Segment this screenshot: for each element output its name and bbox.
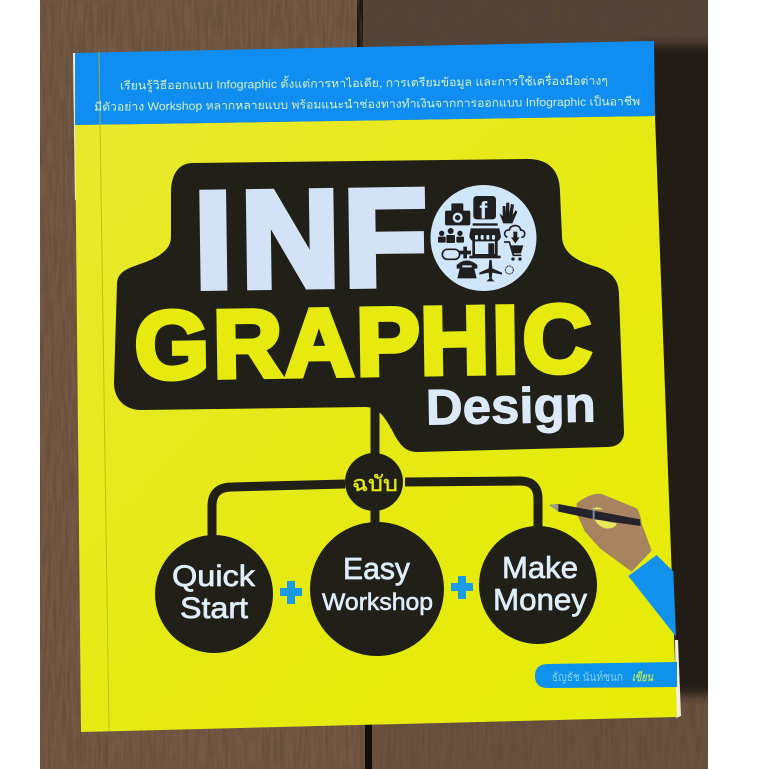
pen: [549, 504, 641, 526]
circle: Quick Start: [155, 535, 273, 653]
icon: cloud download: [505, 225, 525, 243]
icon: facebook: f: [479, 198, 488, 225]
title blob: [114, 159, 624, 452]
icon badge: [430, 185, 536, 291]
yellow cover: [75, 116, 677, 732]
icon: airplane: [479, 260, 502, 281]
circle: Make Money: [479, 526, 597, 644]
circle: Easy Workshop: Easy: [343, 551, 410, 586]
icon: cart: [504, 242, 523, 261]
icon: telephone: [457, 260, 477, 278]
title: Design: Design: [425, 377, 596, 435]
circle: Make Money: Make: [502, 550, 578, 585]
plus sign: [280, 581, 302, 604]
author tag: ธัญธัช นันท์ชนก: [552, 670, 623, 684]
circle label: ฉบับ: ฉบับ: [352, 473, 398, 496]
book cover: [73, 41, 681, 732]
icon: camera: [445, 203, 470, 225]
title: INF: INF: [193, 161, 428, 318]
circle: Quick Start: Quick: [172, 560, 256, 593]
circle label: ฉบับ: [345, 453, 403, 511]
icon: hand: [499, 203, 517, 223]
connector tree: [212, 408, 538, 540]
hand: [577, 494, 652, 572]
icon: sun and cloud: [505, 266, 513, 274]
circle: Quick Start: Start: [180, 592, 249, 625]
author tag: [535, 662, 677, 688]
illustration: hand with pen: [549, 494, 676, 637]
header text: เรียนรู้วิธีออกแบบ Infographic ตั้งแต่การหาไอเดีย, การเตรียมข้อมูล และการใช้เครื่องมือต่างๆ: [120, 72, 608, 93]
circle: Make Money: Money: [493, 582, 588, 617]
icon: plus: [459, 247, 471, 258]
icon: people: [438, 228, 464, 243]
finger gap: [592, 507, 617, 528]
title: GRAPHIC: GRAPHIC: [134, 285, 593, 400]
spine crease: [99, 52, 109, 731]
header text: [94, 72, 640, 114]
sleeve: [628, 555, 676, 637]
blue header band: [75, 41, 655, 125]
circle: Easy Workshop: [310, 522, 444, 656]
author tag: เขียน: [632, 670, 654, 684]
page edge: [73, 53, 78, 200]
header text: มีตัวอย่าง Workshop หลากหลายแบบ พร้อมแนะนำช่องทางทำเงินจากการออกแบบ Infographic เป็นอาชีพ: [94, 93, 640, 114]
circle: Easy Workshop: Workshop: [322, 589, 433, 616]
icon: mouse: [442, 249, 460, 259]
plus sign: [451, 576, 473, 599]
icon: shop: [469, 223, 501, 258]
